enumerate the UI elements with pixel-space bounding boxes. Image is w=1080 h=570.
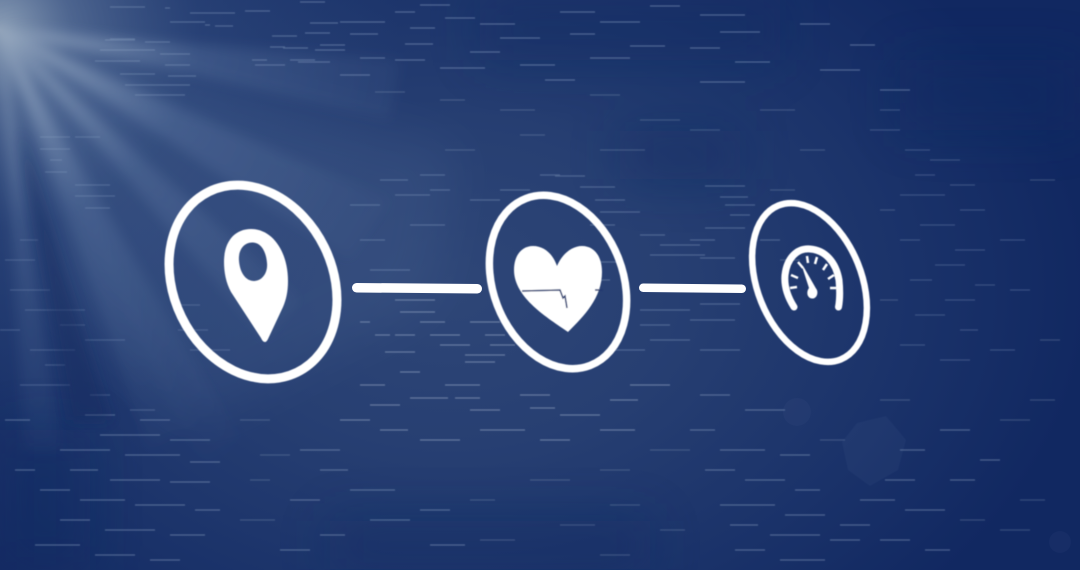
sun rays from the top-left corner [0, 0, 460, 470]
heartbeat crack [522, 290, 603, 308]
connector: location to heart [352, 283, 482, 294]
icon group: gauge [730, 186, 889, 379]
icon group: heart [465, 175, 651, 389]
icon group: location [137, 157, 369, 407]
icon: map pin [224, 229, 288, 342]
icon: heart [514, 246, 602, 332]
bokeh spots [783, 398, 1071, 553]
connector: heart to gauge [639, 283, 746, 293]
location ring [137, 157, 369, 407]
icon: speedometer dial [785, 249, 840, 307]
dark gap between rays [20, 130, 110, 420]
broad diagonal light [0, 30, 460, 420]
gauge needle [802, 268, 817, 299]
dial ticks [790, 256, 836, 288]
heart ring [465, 175, 651, 389]
gauge ring [730, 186, 889, 379]
